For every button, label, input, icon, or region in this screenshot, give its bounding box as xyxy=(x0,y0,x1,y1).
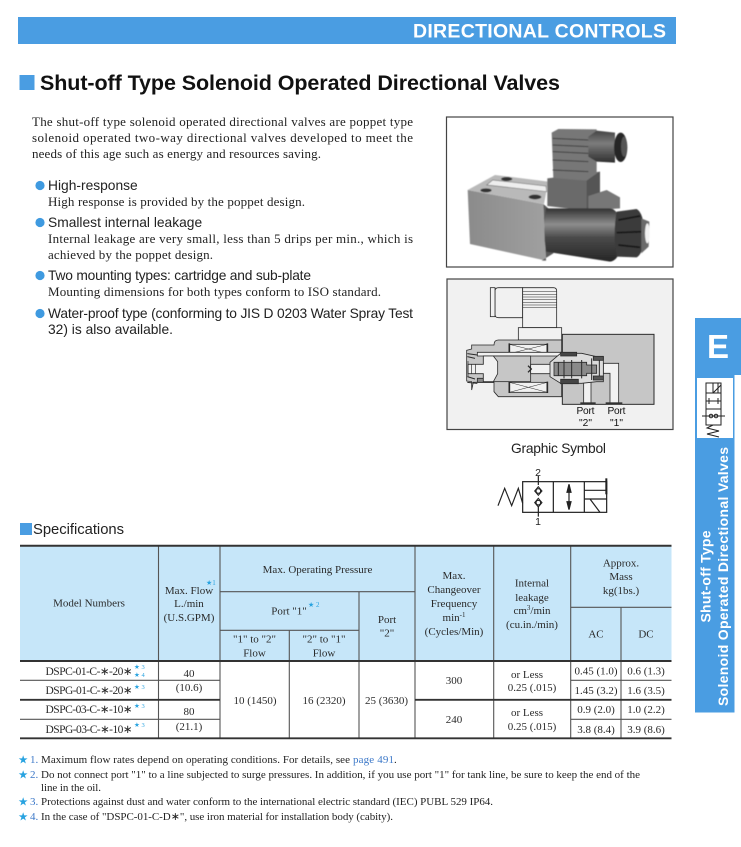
column headers: ★1 xyxy=(206,579,216,587)
column headers: (Cycles/Min) xyxy=(425,626,484,638)
column headers: 3 xyxy=(527,604,531,612)
tab vertical label xyxy=(698,447,731,706)
column headers: Max. Operating Pressure xyxy=(263,564,372,576)
feature: two mounting types xyxy=(35,268,381,299)
table values: 40 xyxy=(184,668,195,680)
footnote 2: line in the oil. xyxy=(41,782,101,794)
column headers: Flow xyxy=(313,648,335,660)
poppet cartridge xyxy=(550,353,603,383)
column headers: Flow xyxy=(243,648,266,660)
column headers: Internal xyxy=(515,578,549,590)
footnote 2: Do not connect port "1" to a line subjected to surge pressures. In addition, if you use port "1" for tank line, be sure to keep the end of the xyxy=(41,769,640,781)
model number rows xyxy=(46,663,145,736)
column headers: "2" xyxy=(380,628,394,640)
model number rows: ★ 3 xyxy=(134,663,145,671)
table values: (10.6) xyxy=(176,682,203,694)
footnote 1: page 491 xyxy=(353,754,394,766)
table values: 0.25 (.015) xyxy=(508,682,557,694)
page title: Shut-off Type Solenoid Operated Directional Valves xyxy=(40,71,560,95)
table values: 1.45 (3.2) xyxy=(574,685,618,697)
intro paragraph: needs of this age such as energy and resources saving. xyxy=(32,146,321,161)
sectional drawing: Port xyxy=(608,406,626,417)
footnote 3: 3. xyxy=(30,796,38,808)
specifications table xyxy=(20,546,672,738)
footnote 4: 4. xyxy=(30,811,38,823)
table values: 1.6 (3.5) xyxy=(627,685,665,697)
tab valve symbol icon xyxy=(697,378,733,438)
feature: two mounting types: Mounting dimensions for both types conform to ISO standard. xyxy=(48,284,381,299)
table values: 0.6 (1.3) xyxy=(627,666,665,678)
specifications heading: Specifications xyxy=(33,522,124,538)
feature list xyxy=(35,178,413,337)
column headers: Approx. xyxy=(603,558,639,570)
graphic symbol diagram: 1 xyxy=(535,516,541,528)
column headers: min xyxy=(443,612,460,624)
model number rows: DSPC-01-C-∗-20∗ xyxy=(46,666,132,678)
model number rows: ★ 3 xyxy=(134,683,145,691)
table values: 10 (1450) xyxy=(233,695,277,707)
feature: smallest internal leakage: achieved by the poppet design. xyxy=(48,247,213,262)
footnote 4: In the case of "DSPC-01-C-D∗", use iron material for installation body (cabity). xyxy=(41,811,393,823)
table values: 240 xyxy=(446,714,463,726)
graphic symbol diagram: 2 xyxy=(535,467,541,479)
column headers xyxy=(53,558,654,660)
column headers: Changeover xyxy=(427,584,481,596)
column headers: Max. xyxy=(443,570,466,582)
intro paragraph xyxy=(32,114,413,161)
footnote 1: . xyxy=(394,754,397,766)
connector xyxy=(495,288,523,318)
column headers: Model Numbers xyxy=(53,598,125,610)
column headers: kg(1bs.) xyxy=(603,585,640,597)
footnote 2 xyxy=(18,768,640,794)
column headers: /min xyxy=(530,605,551,617)
table values xyxy=(176,666,665,736)
footnotes xyxy=(18,752,640,824)
footnote 2: 2. xyxy=(30,769,38,781)
model number rows: DSPG-03-C-∗-10∗ xyxy=(46,724,132,736)
table values: or Less xyxy=(511,707,543,719)
footnote 1: Maximum flow rates depend on operating conditions. For details, see xyxy=(41,754,350,766)
valve body block xyxy=(562,334,654,404)
feature: smallest internal leakage: Internal leakage are very small, less than 5 drips per min., which is xyxy=(48,231,413,246)
feature: high-response xyxy=(35,178,305,209)
column headers: "1" to "2" xyxy=(233,634,276,646)
table values: 0.9 (2.0) xyxy=(577,704,615,716)
tab letter E: E xyxy=(707,328,729,365)
feature: water-proof type: Water-proof type (conforming to JIS D 0203 Water Spray Test xyxy=(48,306,413,321)
model number rows: DSPG-01-C-∗-20∗ xyxy=(46,685,132,697)
footnote 1 xyxy=(18,752,397,766)
intro paragraph: solenoid operated two-way directional valves developed to meet the xyxy=(32,130,413,145)
table values: 3.8 (8.4) xyxy=(577,724,615,736)
sectional drawing: Port xyxy=(576,406,595,417)
plunger xyxy=(477,352,562,356)
tab vertical label: Shut-off Type xyxy=(698,530,714,622)
feature: water-proof type xyxy=(35,306,413,337)
table grid xyxy=(20,546,672,738)
table header background xyxy=(20,546,672,661)
column headers: Mass xyxy=(609,571,633,583)
feature: smallest internal leakage xyxy=(35,215,413,262)
sectional drawing: "2" xyxy=(579,418,592,429)
header bar: directional controls: DIRECTIONAL CONTROLS xyxy=(413,20,666,42)
tab vertical label: Solenoid Operated Directional Valves xyxy=(715,447,731,706)
column headers: DC xyxy=(638,628,654,640)
column headers: Port xyxy=(378,614,396,626)
port passages xyxy=(584,363,619,403)
column headers: (U.S.GPM) xyxy=(164,612,215,624)
table values: 80 xyxy=(184,706,195,718)
solenoid coil housing xyxy=(467,340,562,397)
column headers: leakage xyxy=(515,592,549,604)
table values: or Less xyxy=(511,669,543,681)
side tab xyxy=(695,318,741,712)
product photo of valve xyxy=(446,117,673,267)
column headers: L./min xyxy=(174,598,204,610)
graphic symbol diagram xyxy=(498,467,607,528)
table values: 0.25 (.015) xyxy=(508,721,557,733)
sectional drawing xyxy=(447,279,673,430)
model number rows: DSPC-03-C-∗-10∗ xyxy=(46,704,132,716)
column headers: Port "1" xyxy=(271,606,307,618)
model number rows: ★ 3 xyxy=(134,721,145,729)
feature: smallest internal leakage: Smallest internal leakage xyxy=(48,215,202,230)
column headers: Frequency xyxy=(431,598,478,610)
table values: (21.1) xyxy=(176,721,203,733)
column headers: (cu.in./min) xyxy=(506,619,558,631)
table values: 0.45 (1.0) xyxy=(574,666,618,678)
intro paragraph: The shut-off type solenoid operated directional valves are poppet type xyxy=(32,114,413,129)
footnote 2: ★ xyxy=(18,768,28,782)
column headers: "2" to "1" xyxy=(302,634,346,646)
footnote 3: ★ xyxy=(18,794,28,808)
column headers: ★ 2 xyxy=(308,601,320,609)
footnote 3: Protections against dust and water conform to the international electric standard (IEC) PUBL 529 IP64. xyxy=(41,796,493,808)
model number rows: ★ 4 xyxy=(134,671,145,679)
table values: 1.0 (2.2) xyxy=(627,704,665,716)
header bar: directional controls xyxy=(18,17,676,44)
feature: high-response: High-response xyxy=(48,178,138,193)
feature: water-proof type: 32) is also available. xyxy=(48,322,173,337)
column headers: AC xyxy=(588,628,604,640)
footnote 1: ★ xyxy=(18,752,28,766)
footnote 4: ★ xyxy=(18,810,28,824)
table values: 25 (3630) xyxy=(365,695,408,707)
column headers: -1 xyxy=(460,611,466,619)
table values: 16 (2320) xyxy=(302,695,346,707)
footnote 1: 1. xyxy=(30,754,38,766)
feature: two mounting types: Two mounting types: cartridge and sub-plate xyxy=(48,268,311,283)
feature: high-response: High response is provided by the poppet design. xyxy=(48,194,305,209)
model number rows: ★ 3 xyxy=(134,702,145,710)
graphic symbol heading: Graphic Symbol xyxy=(511,441,606,456)
table values: 3.9 (8.6) xyxy=(627,724,665,736)
table values: 300 xyxy=(446,675,463,687)
sectional drawing: "1" xyxy=(610,418,623,429)
column headers: cm xyxy=(513,605,527,617)
column headers: Max. Flow xyxy=(165,585,213,597)
